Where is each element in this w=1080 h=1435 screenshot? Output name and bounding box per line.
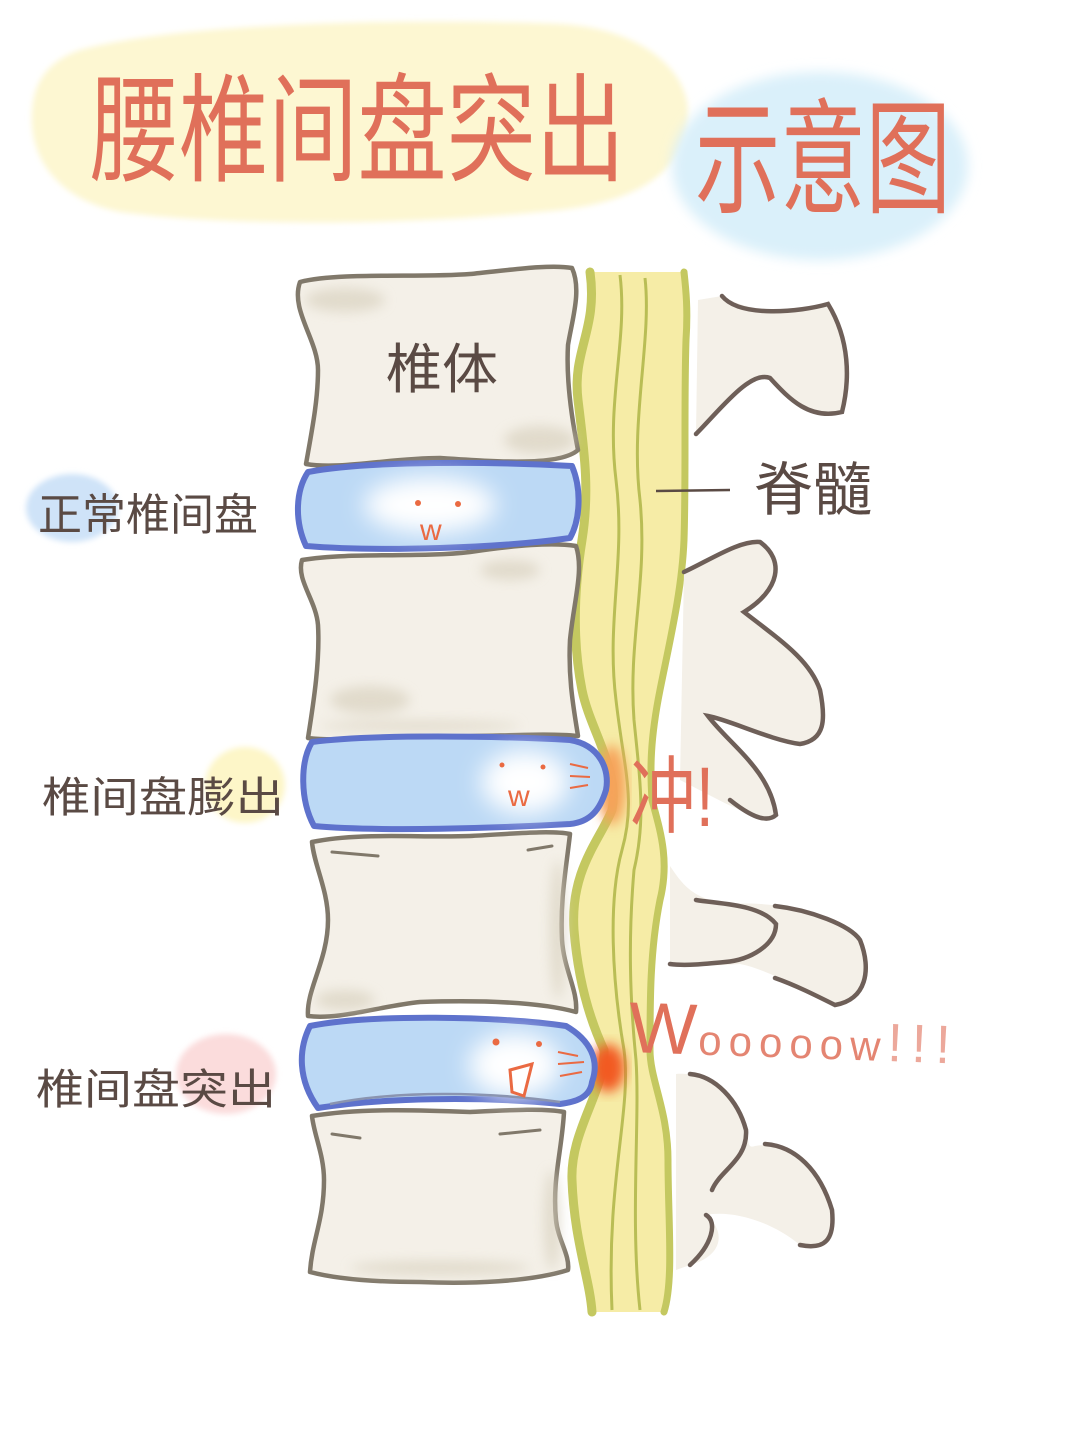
label: bulging disc: 椎间盘膨出 <box>42 774 284 821</box>
label: vertebral body: 椎体 <box>386 340 498 400</box>
face: herniated <box>492 1038 584 1096</box>
cord edge left <box>572 272 613 1312</box>
spinous outline 3 <box>670 900 866 1005</box>
bulge glow <box>598 745 626 825</box>
cord inner lines <box>611 275 628 1310</box>
label: herniated disc <box>36 1034 276 1114</box>
label: bulging disc <box>42 747 285 823</box>
vertebra surface ticks <box>332 846 552 1138</box>
exclamation: wow: Wooooow!!! <box>627 988 961 1080</box>
title: 腰椎间盘突出 <box>90 66 625 198</box>
label: herniated disc: 椎间盘突出 <box>36 1066 276 1113</box>
label: normal disc: 正常椎间盘 <box>38 491 258 540</box>
spinous outline 1 <box>696 296 847 434</box>
face: normal <box>415 500 461 547</box>
spinous process 3 <box>670 866 866 1005</box>
title background: yellow blob <box>32 22 688 223</box>
subtitle: 示意图 <box>695 90 951 230</box>
vertebra 1 <box>298 267 578 466</box>
disc 1: normal <box>298 463 579 549</box>
face: bulging <box>500 762 590 813</box>
spinous process 2 <box>680 542 823 817</box>
spinous process 1 <box>696 296 847 434</box>
disc 2: bulging <box>303 736 626 829</box>
vertebra shading <box>305 288 576 1275</box>
spinous outline 4 <box>690 1074 833 1265</box>
face: normal: w <box>419 514 442 547</box>
cord edge right <box>650 272 687 1312</box>
face: bulging: w <box>507 780 530 813</box>
vertebra 2 <box>301 544 579 739</box>
subtitle background: blue blob <box>672 72 968 260</box>
spinous process 4 <box>676 1074 833 1270</box>
spinous outline 2 <box>684 542 823 819</box>
herniation glow <box>591 1044 625 1092</box>
disc 3: herniated <box>302 1018 625 1108</box>
vertebra 3 <box>308 832 576 1017</box>
vertebra 4 <box>310 1110 568 1283</box>
label: spinal cord: 脊髓 <box>754 458 872 523</box>
spinal cord <box>572 272 687 1312</box>
pointer line to spinal cord <box>656 490 730 491</box>
exclamation: chong: 冲! <box>630 751 714 845</box>
label: normal disc <box>26 474 258 542</box>
